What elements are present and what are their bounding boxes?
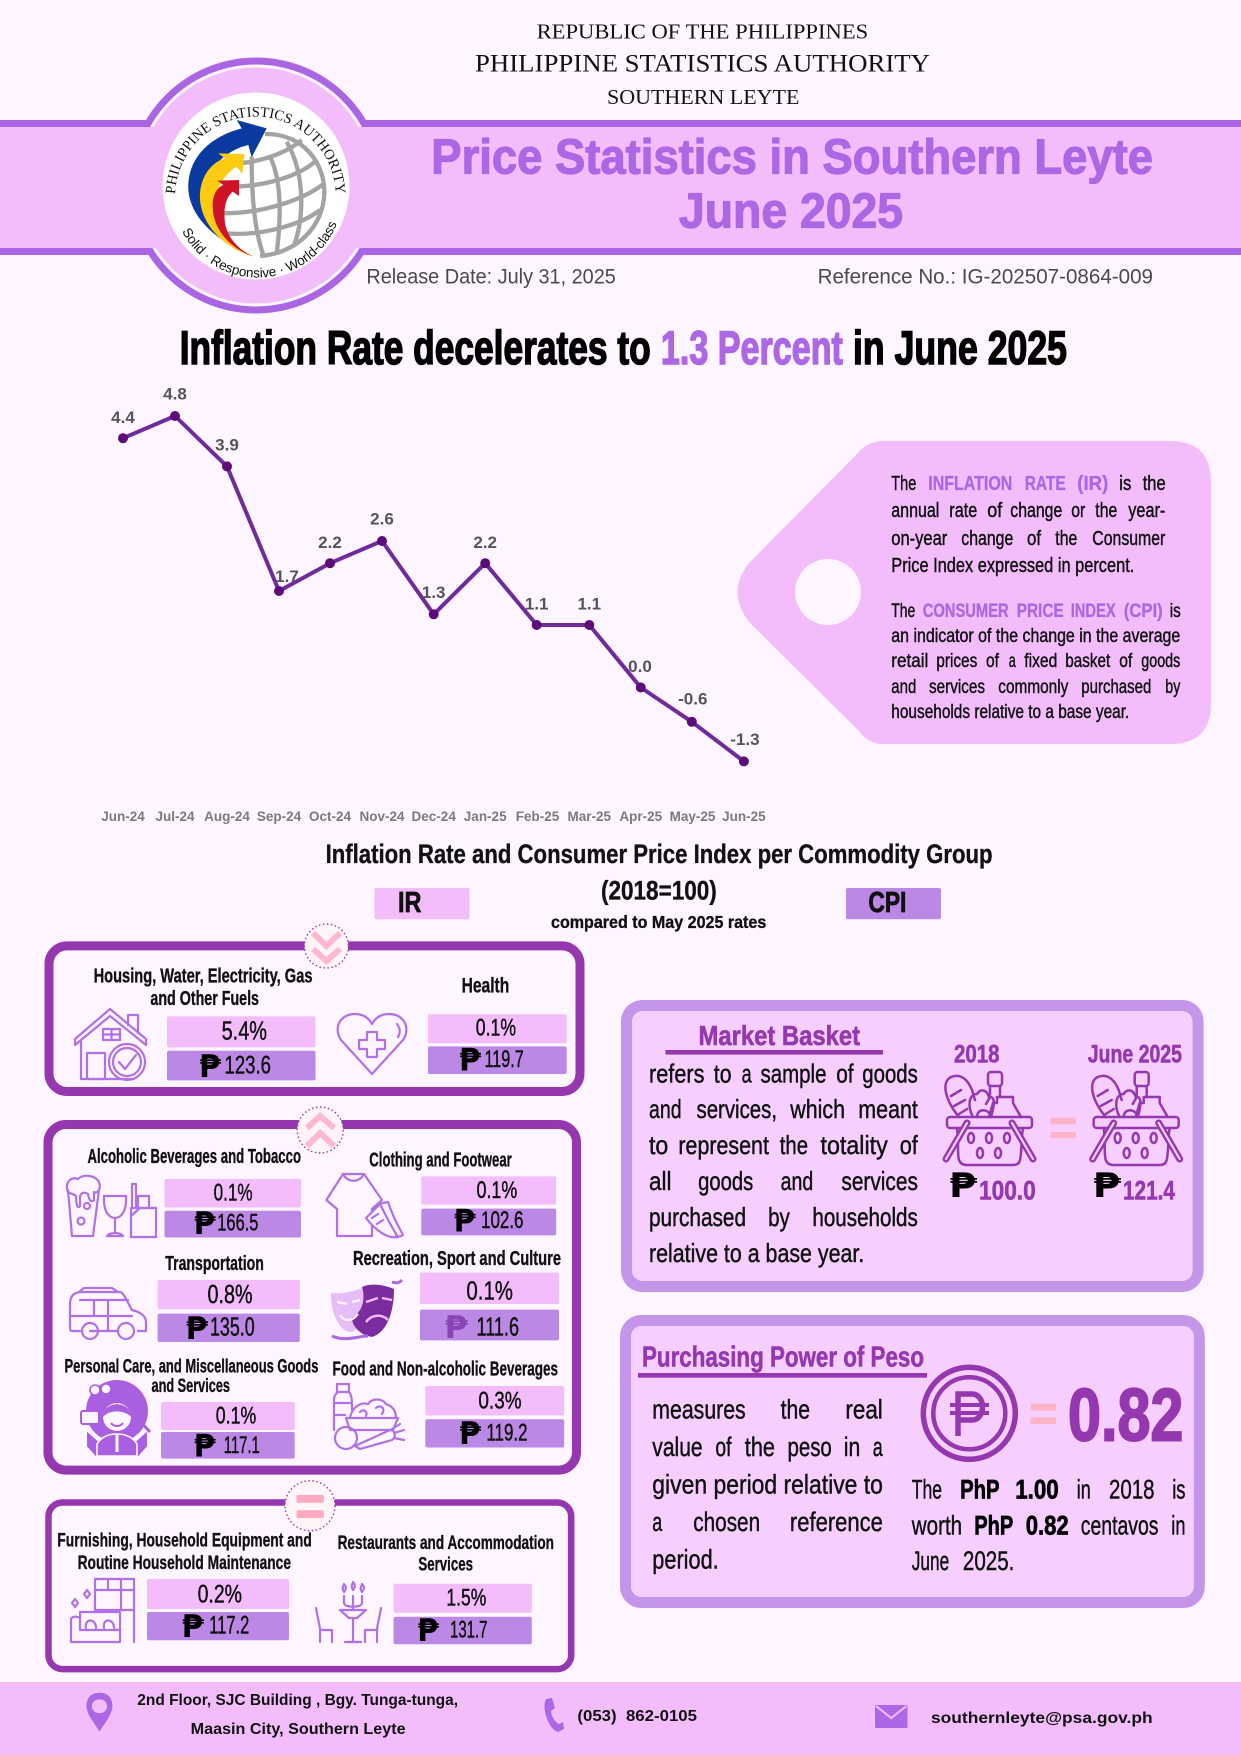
basket 2018: ₱ — [949, 1166, 977, 1206]
group: housing — [75, 966, 316, 1085]
text: market basket definition: refers — [649, 1059, 704, 1089]
group: restaurants: Services — [418, 1554, 473, 1576]
group: restaurants — [316, 1532, 554, 1649]
text: address — [137, 1692, 458, 1738]
text: purchasing power definition: value — [652, 1432, 703, 1462]
heading: purchasing power of peso: Purchasing Power of Peso — [642, 1342, 924, 1374]
group: recreation — [331, 1248, 561, 1346]
text: purchasing power definition: a — [652, 1507, 663, 1537]
text: inflation rate definition: annual — [891, 499, 939, 522]
icon: double chevron down badge — [304, 924, 348, 968]
headline: in June 2025 — [853, 322, 1067, 375]
text: purchasing power definition: real — [845, 1394, 883, 1424]
group: furnishing: ₱ — [182, 1609, 204, 1645]
group: health — [338, 974, 567, 1078]
group: food: 0.3% — [478, 1388, 522, 1415]
icon: person with services — [81, 1380, 150, 1456]
text: purchasing power definition: the — [781, 1394, 810, 1424]
group: transportation: 0.8% — [208, 1279, 252, 1309]
line chart: inflation rate: 1.7 — [275, 567, 299, 586]
basket June 2025: June 2025 — [1088, 1041, 1182, 1069]
icon: food and bottle — [334, 1384, 404, 1449]
panel: commodity groups with lower rates — [48, 1107, 576, 1470]
legend: CPI: CPI — [868, 887, 906, 919]
line chart: inflation rate: Jun-24 — [101, 809, 145, 824]
line chart: inflation rate: 0.0 — [628, 657, 652, 676]
line chart: inflation rate: Apr-25 — [619, 809, 663, 824]
group: alcoholic beverages: 0.1% — [214, 1179, 252, 1206]
text: consumer price index definition: PRICE — [1017, 600, 1064, 622]
text: purchasing power definition — [652, 1394, 883, 1574]
group: recreation: ₱ — [444, 1310, 468, 1346]
group: personal care — [64, 1356, 318, 1464]
text: inflation rate definition: on-year — [891, 527, 947, 550]
text: market basket definition: a — [742, 1059, 752, 1089]
line chart: inflation rate: Jun-25 — [722, 809, 766, 824]
line chart: inflation rate: Feb-25 — [516, 809, 560, 824]
release date and reference number: Reference No.: IG-202507-0864-009 — [818, 265, 1153, 288]
text: market basket definition: by — [768, 1202, 790, 1232]
main title: June 2025 — [679, 185, 903, 239]
group: alcoholic beverages: Alcoholic Beverages and Tobacco — [88, 1146, 301, 1168]
panel: market basket — [626, 1006, 1198, 1286]
text: market basket definition: goods — [698, 1166, 753, 1196]
text: peso worth statement: 0.82 — [1026, 1510, 1069, 1540]
group: transportation: Transportation — [165, 1253, 264, 1275]
line chart: inflation rate: Oct-24 — [309, 809, 351, 824]
group: personal care: and Services — [152, 1375, 230, 1397]
text: purchasing power definition: in — [844, 1432, 860, 1462]
group: furnishing: 117.2 — [209, 1611, 249, 1639]
basket June 2025 — [1088, 1041, 1182, 1206]
text: inflation rate definition: of — [987, 499, 1003, 522]
header: agency names — [475, 19, 930, 109]
section heading: commodity group: (2018=100) — [601, 876, 717, 906]
group: recreation: Recreation, Sport and Culture — [353, 1248, 561, 1270]
text: market basket definition: purchased — [649, 1202, 746, 1232]
text: inflation rate definition: Price Index expressed in percent. — [891, 554, 1134, 577]
icon: cabinet and sofa — [71, 1579, 134, 1642]
group: clothing: ₱ — [454, 1204, 476, 1240]
text: peso worth statement: The — [912, 1474, 942, 1504]
text: inflation rate definition: or — [1071, 499, 1085, 522]
line chart: inflation rate: 4.8 — [163, 385, 187, 404]
text: consumer price index definition: services — [929, 676, 985, 698]
line chart: inflation rate: 2.2 — [318, 533, 342, 552]
group: restaurants: Restaurants and Accommodation — [338, 1532, 554, 1554]
equal sign — [1030, 1404, 1056, 1424]
line chart: inflation rate: 1.1 — [577, 595, 601, 614]
text: market basket definition: which — [789, 1094, 845, 1124]
group: clothing: Clothing and Footwear — [369, 1149, 512, 1171]
group: personal care: Personal Care, and Miscellaneous Goods — [64, 1356, 318, 1378]
header: agency names: REPUBLIC OF THE PHILIPPINES — [537, 19, 868, 43]
headline: Inflation Rate decelerates to — [180, 322, 651, 375]
text: market basket definition: services, — [696, 1094, 777, 1124]
text: inflation rate definition: is — [1119, 472, 1131, 495]
group: personal care: 117.1 — [224, 1432, 260, 1459]
text: consumer price index definition: prices — [936, 650, 977, 672]
text: peso worth statement: 2025. — [963, 1546, 1014, 1576]
group: housing: 123.6 — [224, 1052, 271, 1080]
icon: dining table — [316, 1582, 381, 1642]
text: inflation rate definition: the — [1095, 499, 1117, 522]
line chart: inflation rate: 4.4 — [111, 408, 135, 427]
PSA logo — [162, 92, 350, 280]
basket 2018: 2018 — [954, 1041, 1000, 1069]
text: consumer price index definition: goods — [1141, 650, 1180, 672]
text: peso worth statement: centavos — [1081, 1510, 1158, 1540]
line chart: inflation rate: 2.2 — [473, 533, 497, 552]
group: furnishing: Routine Household Maintenance — [78, 1552, 291, 1574]
line chart: inflation rate: -0.6 — [678, 689, 707, 708]
text: market basket definition — [649, 1059, 919, 1268]
legend: IR: IR — [398, 887, 421, 919]
text: purchasing power definition: peso — [788, 1432, 832, 1462]
line chart: inflation rate: Sep-24 — [257, 809, 302, 824]
equal sign — [1051, 1118, 1076, 1138]
icon: location pin — [86, 1693, 112, 1732]
icon: beer, wine and cigarettes — [67, 1176, 156, 1237]
text: peso worth statement: in — [1171, 1510, 1185, 1540]
line chart: inflation rate: -1.3 — [730, 730, 760, 749]
group: recreation: 111.6 — [476, 1311, 519, 1341]
text: consumer price index definition: by — [1165, 676, 1180, 698]
group: health: 119.7 — [484, 1046, 524, 1073]
text: inflation rate definition: the — [1055, 527, 1077, 550]
group: furnishing: Furnishing, Household Equipment and — [57, 1530, 312, 1552]
text: inflation rate definition: rate — [949, 499, 977, 522]
text: consumer price index definition: (CPI) — [1124, 600, 1163, 622]
text: consumer price index definition: purchased — [1081, 676, 1151, 698]
icon: shirt and shoes — [326, 1174, 403, 1237]
text: peso worth statement: PhP — [974, 1510, 1013, 1540]
header: agency names: SOUTHERN LEYTE — [607, 85, 799, 109]
text: market basket definition: goods — [862, 1059, 918, 1089]
line chart: inflation rate: Jan-25 — [464, 809, 507, 824]
group: housing: and Other Fuels — [150, 988, 259, 1010]
group: restaurants: ₱ — [417, 1613, 439, 1649]
group: alcoholic beverages — [67, 1146, 301, 1242]
text: consumer price index definition: is — [1170, 600, 1181, 622]
group: restaurants: 1.5% — [446, 1585, 486, 1612]
text: inflation rate definition: (IR) — [1077, 472, 1108, 495]
text: market basket definition: households — [812, 1202, 918, 1232]
text: consumer price index definition: of — [986, 650, 999, 672]
basket June 2025: 121.4 — [1123, 1175, 1175, 1205]
basket 2018 — [945, 1041, 1036, 1206]
text: market basket definition: all — [649, 1166, 672, 1196]
group: health: ₱ — [459, 1042, 481, 1078]
line chart: inflation rate: Dec-24 — [412, 809, 456, 824]
text: market basket definition: sample — [760, 1059, 826, 1089]
text: peso worth statement: 1.00 — [1015, 1474, 1059, 1504]
group: housing: ₱ — [199, 1049, 221, 1085]
line chart: inflation rate — [101, 385, 766, 824]
text: consumer price index definition: households relative to a base year. — [891, 701, 1129, 723]
text: purchasing power definition: of — [715, 1432, 732, 1462]
text: peso worth statement: PhP — [960, 1474, 1000, 1504]
text: market basket definition: and — [649, 1094, 682, 1124]
text: market basket definition: to — [714, 1059, 732, 1089]
group: housing: Housing, Water, Electricity, Gas — [94, 966, 312, 988]
text: consumer price index definition: The — [891, 600, 915, 622]
line chart: inflation rate: May-25 — [670, 809, 716, 824]
text: consumer price index definition: INDEX — [1071, 600, 1116, 622]
icon: email — [875, 1705, 908, 1728]
panel: purchasing power of peso — [626, 1320, 1199, 1602]
text: market basket definition: the — [780, 1130, 808, 1160]
text: address: Maasin City, Southern Leyte — [191, 1721, 406, 1738]
heading: market basket: Market Basket — [698, 1020, 860, 1051]
header: agency names: PHILIPPINE STATISTICS AUTHORITY — [475, 49, 930, 78]
text: market basket definition: totality — [820, 1130, 888, 1160]
icon: phone — [544, 1698, 564, 1732]
legend: CPI — [846, 887, 941, 919]
line chart: inflation rate: 1.1 — [525, 595, 549, 614]
group: health: 0.1% — [476, 1014, 516, 1041]
group: personal care: 0.1% — [216, 1403, 256, 1430]
icon: theatre masks — [331, 1280, 402, 1339]
release date and reference number: Release Date: July 31, 2025 — [366, 265, 616, 288]
line chart: inflation rate: Nov-24 — [359, 809, 405, 824]
text: market basket definition: of — [900, 1130, 918, 1160]
group: health: Health — [462, 974, 509, 998]
section heading: commodity group: Inflation Rate and Consumer Price Index per Commodity Group — [326, 839, 993, 869]
panel: commodity groups with higher rates — [49, 924, 580, 1092]
text: market basket definition: to — [649, 1130, 668, 1160]
group: housing: 5.4% — [222, 1016, 267, 1046]
basket June 2025: ₱ — [1093, 1166, 1121, 1206]
panel: commodity groups with unchanged rates — [48, 1481, 571, 1669]
text: consumer price index definition: commonly — [998, 676, 1068, 698]
text: inflation rate definition: The — [891, 472, 916, 495]
group: alcoholic beverages: ₱ — [194, 1206, 216, 1242]
text: address: 2nd Floor, SJC Building , Bgy. Tunga-tunga, — [137, 1692, 458, 1709]
icon: double chevron up badge — [297, 1107, 343, 1153]
group: transportation: ₱ — [186, 1311, 208, 1347]
text: peso worth statement: 2018 — [1109, 1474, 1154, 1504]
group: clothing: 102.6 — [481, 1207, 524, 1234]
text: purchasing power definition: given period relative to — [652, 1469, 883, 1499]
group: transportation: 135.0 — [210, 1311, 255, 1341]
text: consumer price index definition: and — [891, 676, 916, 698]
text: market basket definition: meant — [858, 1094, 919, 1124]
text: peso worth statement: worth — [911, 1510, 962, 1540]
text: market basket definition: and — [781, 1166, 813, 1196]
group: furnishing: 0.2% — [198, 1580, 242, 1608]
group: recreation: 0.1% — [466, 1276, 513, 1306]
legend: IR — [374, 887, 470, 919]
text: consumer price index definition: a — [1009, 650, 1016, 672]
text: peso worth statement: is — [1172, 1474, 1186, 1504]
group: restaurants: 131.7 — [450, 1617, 488, 1644]
text: phone: (053) 862-0105 — [577, 1708, 697, 1725]
group: transportation — [70, 1253, 300, 1347]
section heading: commodity group: compared to May 2025 rates — [551, 912, 767, 932]
value: 0.82: 0.82 — [1068, 1374, 1183, 1457]
text: peso worth statement: in — [1077, 1474, 1091, 1504]
panel: definitions price tag — [738, 441, 1211, 744]
basket 2018: 100.0 — [979, 1175, 1036, 1205]
group: food — [332, 1358, 564, 1452]
text: peso worth statement — [911, 1474, 1186, 1576]
text: market basket definition: services — [841, 1166, 918, 1196]
text: consumer price index definition: CONSUMER — [923, 600, 1009, 622]
icon: peso coin — [923, 1367, 1015, 1459]
text: consumer price index definition: an indicator of the change in the average — [891, 625, 1180, 647]
section heading: commodity group — [326, 839, 993, 932]
group: clothing — [326, 1149, 556, 1240]
text: inflation rate definition — [891, 472, 1166, 577]
text: consumer price index definition — [891, 600, 1181, 723]
main title: Price Statistics in Southern Leyte — [431, 130, 1153, 184]
text: purchasing power definition: a — [873, 1432, 883, 1462]
icon: equal sign badge — [285, 1481, 335, 1531]
group: clothing: 0.1% — [476, 1177, 517, 1204]
text: inflation rate definition: year- — [1128, 499, 1165, 522]
icon: heart with cross — [338, 1014, 406, 1074]
icon: house — [75, 1009, 146, 1080]
text: consumer price index definition: of — [1119, 650, 1133, 672]
text: purchasing power definition: chosen — [693, 1507, 760, 1537]
text: inflation rate definition: of — [1027, 527, 1041, 550]
line chart: inflation rate: Mar-25 — [568, 809, 612, 824]
PSA logo: Solid · Responsive · World-class — [183, 222, 336, 278]
headline: 1.3 Percent — [661, 322, 843, 375]
text: inflation rate definition: INFLATION — [928, 472, 1012, 495]
line chart: inflation rate: 1.3 — [422, 583, 446, 602]
text: market basket definition: relative to a base year. — [649, 1238, 864, 1268]
group: food: 119.2 — [486, 1420, 528, 1447]
text: purchasing power definition: the — [745, 1432, 775, 1462]
text: inflation rate definition: Consumer — [1092, 527, 1165, 550]
text: email: southernleyte@psa.gov.ph — [931, 1710, 1153, 1727]
group: food: ₱ — [459, 1416, 481, 1452]
main title — [431, 130, 1153, 239]
group: personal care: ₱ — [194, 1428, 216, 1464]
text: market basket definition: of — [836, 1059, 854, 1089]
text: inflation rate definition: the — [1143, 472, 1166, 495]
text: market basket definition: represent — [678, 1130, 770, 1160]
text: peso worth statement: June — [912, 1546, 949, 1576]
icon: van — [70, 1288, 146, 1339]
text: inflation rate definition: change — [961, 527, 1013, 550]
footer — [0, 1682, 1241, 1755]
line chart: inflation rate: Jul-24 — [155, 809, 195, 824]
text: purchasing power definition: period. — [652, 1544, 719, 1574]
line chart: inflation rate: Aug-24 — [204, 809, 250, 824]
release date and reference number — [366, 265, 1153, 288]
text: purchasing power definition: measures — [652, 1394, 746, 1424]
line chart: inflation rate: 3.9 — [215, 436, 239, 455]
text: consumer price index definition: fixed — [1024, 650, 1057, 672]
text: purchasing power definition: reference — [790, 1507, 883, 1537]
header band with seal — [0, 58, 1241, 314]
group: food: Food and Non-alcoholic Beverages — [332, 1358, 558, 1380]
group: alcoholic beverages: 166.5 — [217, 1210, 258, 1237]
text: consumer price index definition: retail — [891, 650, 928, 672]
PSA logo: PHILIPPINE STATISTICS AUTHORITY — [166, 106, 346, 194]
text: consumer price index definition: basket — [1065, 650, 1111, 672]
text: inflation rate definition: change — [1010, 499, 1062, 522]
line chart: inflation rate: 2.6 — [370, 510, 394, 529]
group: furnishing — [57, 1530, 312, 1645]
text: inflation rate definition: RATE — [1025, 472, 1066, 495]
